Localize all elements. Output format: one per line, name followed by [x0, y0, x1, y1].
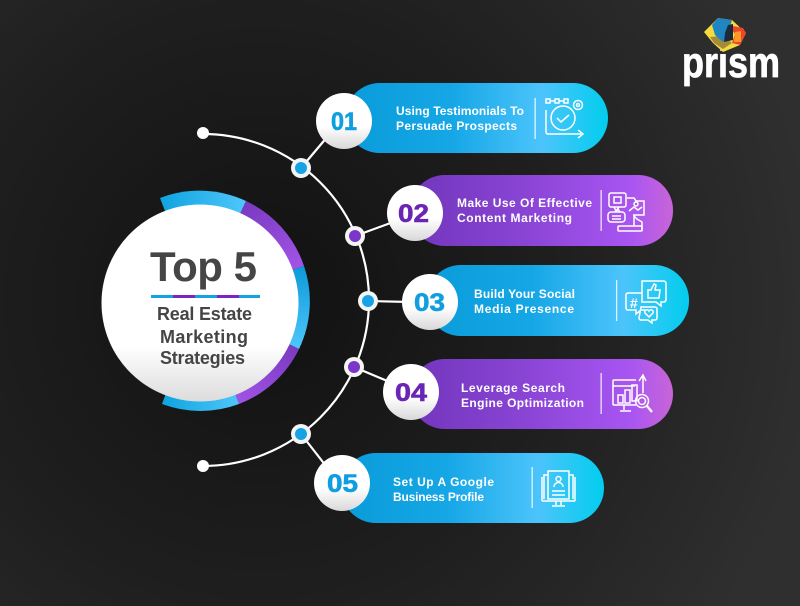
label: Business Profile — [393, 490, 484, 504]
label: Make Use Of Effective — [457, 196, 592, 210]
label — [457, 196, 592, 225]
label: Build Your Social — [474, 287, 575, 301]
number: 04 — [395, 379, 427, 407]
logo: Prism — [682, 18, 780, 87]
panel: strategy 01 — [316, 83, 608, 153]
label: Set Up A Google — [393, 475, 494, 489]
icon: social media bubbles: # — [630, 295, 638, 311]
logo mark — [704, 18, 746, 52]
number: 02 — [398, 200, 429, 228]
panel: strategy 04 — [383, 359, 673, 429]
number badge — [314, 455, 370, 511]
divider — [532, 467, 533, 508]
white disc — [102, 204, 298, 402]
label: Content Marketing — [457, 211, 572, 225]
label — [393, 475, 494, 504]
subtitle — [157, 304, 252, 368]
icon: business profile monitor — [542, 471, 575, 506]
timeline node 5 — [291, 424, 311, 444]
panel: strategy 03 — [402, 265, 689, 336]
pill — [345, 83, 608, 153]
label: Leverage Search — [461, 381, 565, 395]
number badge — [402, 274, 458, 330]
label: Engine Optimization — [461, 396, 584, 410]
pill — [410, 359, 673, 429]
arc end dot: top — [197, 127, 209, 139]
icon: testimonial check cycle — [546, 99, 583, 138]
panel: strategy 05 — [314, 453, 604, 523]
pill — [341, 453, 604, 523]
label: Media Presence — [474, 302, 574, 316]
icon: SEO analytics — [613, 375, 652, 412]
number: 01 — [331, 108, 357, 136]
number: 05 — [327, 470, 358, 498]
arc end dot: bottom — [197, 460, 209, 472]
pill — [410, 175, 673, 246]
number badge — [316, 93, 372, 149]
central badge — [102, 191, 310, 411]
label — [474, 287, 575, 316]
icon: content devices — [608, 193, 644, 231]
number badge — [387, 185, 443, 241]
number: 03 — [414, 289, 445, 317]
subtitle: Marketing — [160, 327, 248, 347]
timeline node 2 — [345, 226, 365, 246]
pill — [426, 265, 689, 336]
divider — [534, 98, 536, 139]
timeline node 3 — [358, 291, 378, 311]
subtitle: Real Estate — [157, 304, 252, 324]
label: Persuade Prospects — [396, 119, 517, 133]
subtitle: Strategies — [160, 348, 245, 368]
divider — [600, 190, 602, 231]
divider — [600, 373, 602, 414]
timeline node 1 — [291, 158, 311, 178]
divider — [616, 280, 617, 321]
heading underline — [151, 295, 260, 298]
heading: Top 5: Top 5 — [150, 243, 257, 290]
label — [461, 381, 584, 410]
number badge — [383, 364, 439, 420]
label: Using Testimonials To — [396, 104, 524, 118]
timeline arc with connectors — [203, 134, 410, 466]
timeline node 4 — [344, 357, 364, 377]
icon: social media bubbles — [626, 281, 666, 323]
panel: strategy 02 — [387, 175, 673, 246]
label — [396, 104, 524, 133]
logo wordmark: prism — [682, 39, 780, 87]
segmented ring — [160, 191, 310, 411]
